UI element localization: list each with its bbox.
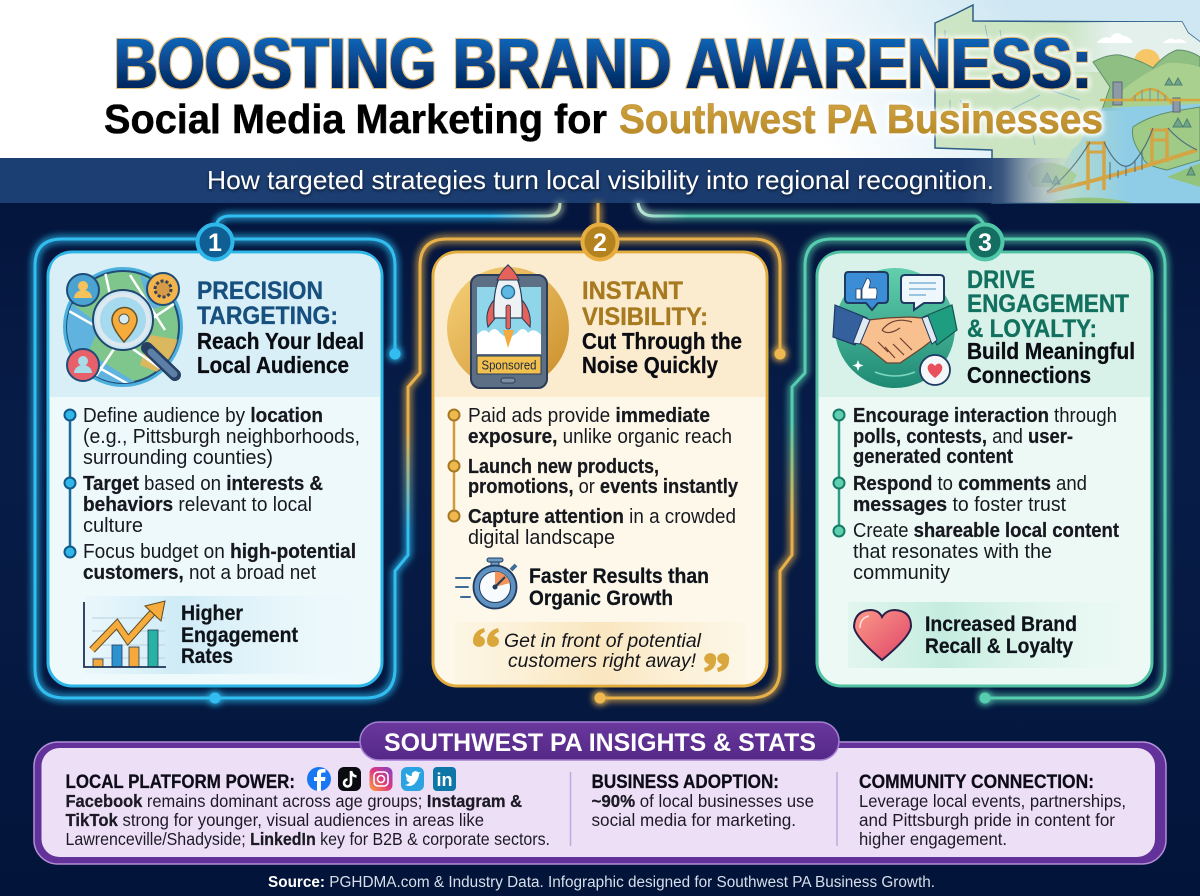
panel 1 heading: Local Audience xyxy=(197,352,349,378)
column: local platform power: TikTok strong for younger, visual audiences in areas like xyxy=(66,810,484,830)
card header tint xyxy=(50,254,380,397)
column: community connection: Leverage local events, partnerships, xyxy=(859,791,1126,811)
panel 1 heading: Reach Your Ideal xyxy=(197,328,364,354)
stat text: faster results xyxy=(529,565,709,610)
panel 3 bullet list: messages to foster trust xyxy=(853,494,1066,516)
stat text: faster results: Faster Results than xyxy=(529,565,709,588)
icon: handshake with like, comment and heart xyxy=(833,268,957,388)
panel 2 heading: Cut Through the xyxy=(582,328,742,354)
panel 2 heading xyxy=(582,277,742,378)
number badge 2 xyxy=(582,224,618,260)
panel 2 bullet list xyxy=(468,405,739,549)
stat text: increased brand recall: Increased Brand xyxy=(925,613,1077,636)
stat text: increased brand recall xyxy=(925,613,1077,658)
panel 2 heading: Noise Quickly xyxy=(582,352,718,378)
panel 2: instant visibility xyxy=(433,224,767,686)
panel 2 bullet timeline xyxy=(448,410,460,522)
social media icons: in xyxy=(436,770,452,790)
icon: phone with rocket xyxy=(447,265,569,389)
number badge 2: 2 xyxy=(593,229,607,257)
panel 1 bullet list: Define audience by location xyxy=(83,405,323,427)
panel 2 bullet list: digital landscape xyxy=(468,527,615,549)
panel 3 bullet list: that resonates with the xyxy=(853,541,1052,563)
panel 3 bullet list: generated content xyxy=(853,446,1013,468)
panel 3 bullet list xyxy=(853,405,1119,584)
panel 3 heading: & LOYALTY: xyxy=(967,315,1097,343)
outer purple frame xyxy=(34,742,1166,864)
quote band xyxy=(455,622,747,684)
stat text: higher engagement rates: Higher xyxy=(181,602,243,625)
panel: southwest PA insights and stats xyxy=(34,722,1166,864)
panel 2 bullet list: exposure, unlike organic reach xyxy=(468,426,732,448)
social media icons xyxy=(307,767,456,791)
panel 3 heading: DRIVE xyxy=(967,266,1035,294)
column: business adoption: BUSINESS ADOPTION: xyxy=(592,772,779,793)
subtitle heading: Social Media Marketing for xyxy=(104,96,607,142)
column: community connection xyxy=(859,772,1126,849)
header background xyxy=(0,0,1200,158)
heading pill: SOUTHWEST PA INSIGHTS & STATS xyxy=(384,729,816,757)
column: community connection: higher engagement. xyxy=(859,829,1007,849)
callout: quote xyxy=(473,628,729,672)
stat text: higher engagement rates xyxy=(181,602,298,668)
panel 3 bullet list: community xyxy=(853,562,950,584)
panel 3 bullet list: Encourage interaction through xyxy=(853,405,1117,427)
icon: stopwatch xyxy=(456,558,516,608)
number badge 1 xyxy=(198,224,232,260)
panel 3 bullet list: polls, contests, and user- xyxy=(853,426,1073,448)
subtitle heading xyxy=(104,96,1103,142)
tagline: How targeted strategies turn local visibility into regional recognition. xyxy=(207,165,994,195)
panel 3 bullet list: Create shareable local content xyxy=(853,520,1119,542)
panel 2 bullet list: promotions, or events instantly xyxy=(468,476,739,498)
panel 1 bullet timeline xyxy=(64,410,76,558)
panel 2 heading: VISIBILITY: xyxy=(582,303,708,331)
panel 3 bullet list: Respond to comments and xyxy=(853,473,1087,495)
callout: quote: customers right away! xyxy=(508,650,697,672)
panel 3 heading: Connections xyxy=(967,362,1091,388)
card header tint xyxy=(819,254,1150,397)
column: business adoption xyxy=(592,772,814,830)
panel 2 bullet list: Paid ads provide immediate xyxy=(468,405,710,427)
panel 3 heading xyxy=(967,266,1135,388)
panel 1 bullet list: Target based on interests & xyxy=(83,473,323,495)
panel 1 heading: PRECISION xyxy=(197,277,323,305)
icon: growth chart xyxy=(84,601,166,667)
column: business adoption: social media for marketing. xyxy=(592,810,796,830)
column: community connection: and Pittsburgh pride in content for xyxy=(859,810,1115,830)
subtitle band background xyxy=(0,158,1200,203)
column: local platform power xyxy=(66,772,550,849)
number badge 3: 3 xyxy=(978,229,992,257)
callout: quote: Get in front of potential xyxy=(504,630,702,652)
divider xyxy=(570,772,837,846)
number badge 3 xyxy=(968,224,1002,260)
panel 3 bullet timeline xyxy=(834,410,844,536)
column: business adoption: ~90% of local businesses use xyxy=(592,791,814,811)
number badge 1: 1 xyxy=(208,229,222,257)
source footer: Source: PGHDMA.com & Industry Data. Infographic designed for Southwest PA Business Growth. xyxy=(268,874,935,891)
panel 1: precision targeting xyxy=(48,224,382,686)
stat text: faster results: Organic Growth xyxy=(529,587,673,610)
connector lines and neon frames xyxy=(35,203,1165,704)
map of Pennsylvania with bridges landscape xyxy=(935,5,1200,203)
card header tint xyxy=(435,254,765,397)
column: local platform power: Lawrenceville/Shadyside; LinkedIn key for B2B & corporate sectors. xyxy=(66,829,550,849)
column: local platform power: Facebook remains dominant across age groups; Instagram & xyxy=(66,791,522,811)
icon: phone with rocket: Sponsored xyxy=(482,358,537,372)
subtitle heading: Southwest PA Businesses xyxy=(619,96,1103,142)
stat text: increased brand recall: Recall & Loyalty xyxy=(925,635,1073,658)
panel 3 heading: Build Meaningful xyxy=(967,338,1135,364)
icon: heart xyxy=(854,610,911,660)
card background xyxy=(433,252,767,686)
card background xyxy=(48,252,382,686)
panel 1 bullet list: surrounding counties) xyxy=(83,447,273,469)
panel 1 heading xyxy=(197,277,364,378)
panel 1 heading: TARGETING: xyxy=(197,302,338,330)
inner lilac panel xyxy=(42,748,1155,857)
panel 2 heading: INSTANT xyxy=(582,277,683,305)
panel 1 bullet list: (e.g., Pittsburgh neighborhoods, xyxy=(83,426,360,448)
column: community connection: COMMUNITY CONNECTION: xyxy=(859,772,1094,793)
stat band: higher engagement xyxy=(85,596,350,674)
stat text: higher engagement rates: Rates xyxy=(181,645,233,668)
panel 1 bullet list xyxy=(83,405,360,584)
panel 2 bullet list: Capture attention in a crowded xyxy=(468,506,736,528)
icon: map with magnifier xyxy=(63,267,183,387)
panel 3: drive engagement xyxy=(817,224,1152,686)
panel 1 bullet list: customers, not a broad net xyxy=(83,562,316,584)
panel 3 heading: ENGAGEMENT xyxy=(967,290,1129,318)
panel 1 bullet list: Focus budget on high-potential xyxy=(83,541,356,563)
stat text: higher engagement rates: Engagement xyxy=(181,624,298,647)
panel 1 bullet list: behaviors relevant to local xyxy=(83,494,312,516)
card background xyxy=(817,252,1152,686)
panel 2 bullet list: Launch new products, xyxy=(468,456,659,478)
column: local platform power: LOCAL PLATFORM POWER: xyxy=(66,772,295,793)
stat band: brand recall xyxy=(848,602,1120,668)
heading pill xyxy=(360,722,839,760)
panel 1 bullet list: culture xyxy=(83,515,143,537)
